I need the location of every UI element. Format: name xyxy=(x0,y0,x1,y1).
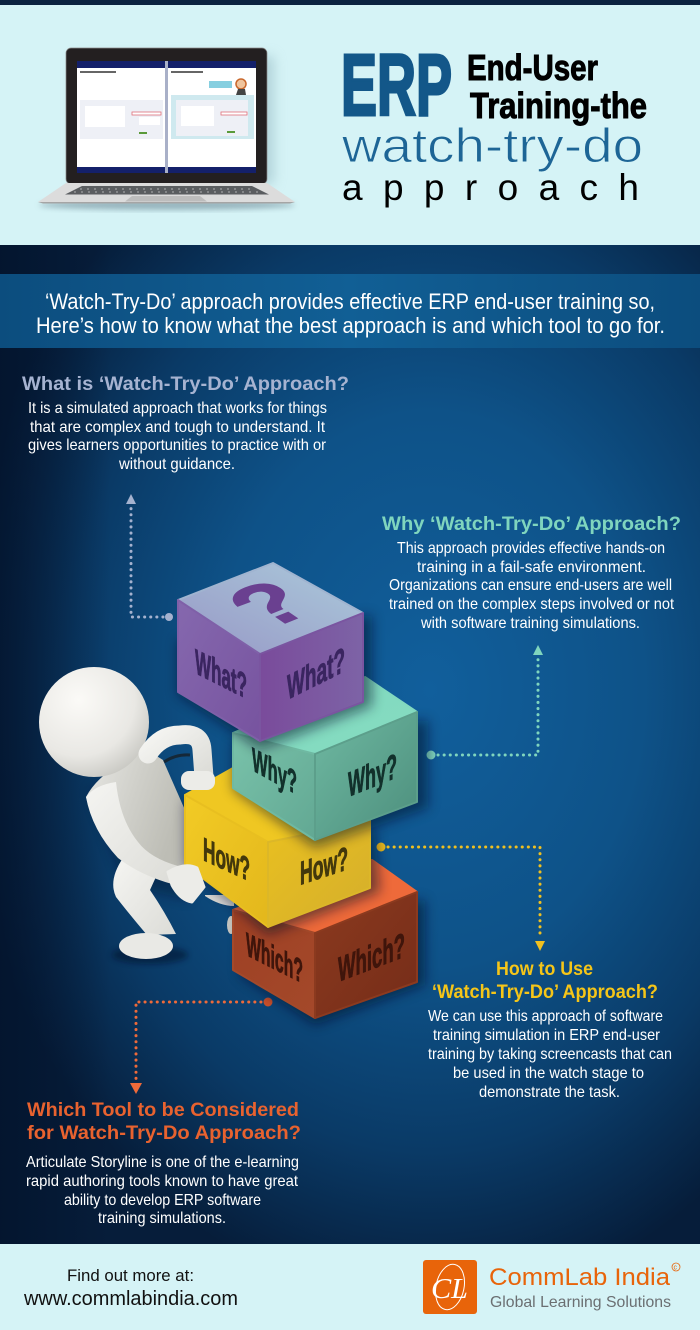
cube: what: What? xyxy=(287,639,345,708)
text block: which: Articulate Storyline is one of the e-learning xyxy=(26,1154,299,1171)
title: Training-the xyxy=(470,85,647,126)
text block: how: training simulation in ERP end-user xyxy=(433,1027,661,1044)
text block: how: How to Use xyxy=(496,958,593,980)
figure: head and arms of white character xyxy=(39,667,215,902)
call to action xyxy=(23,1266,238,1310)
logo: CommLab India: CommLab India xyxy=(489,1264,671,1291)
cube: why: Why? xyxy=(252,740,297,802)
arrow: which connector xyxy=(130,998,272,1094)
arrow: how connector xyxy=(376,842,545,951)
cube: what xyxy=(178,563,372,750)
cube: how: How? xyxy=(300,840,348,893)
icon: question mark: ? xyxy=(206,568,334,640)
logo: CommLab India xyxy=(423,1260,680,1314)
text block: which xyxy=(26,1099,301,1227)
cube: which: Which? xyxy=(246,926,303,991)
logo: CommLab India: CL xyxy=(431,1274,468,1305)
cube: which xyxy=(233,860,425,1025)
text block: what xyxy=(22,373,349,473)
text block: why: Organizations can ensure end-users are well xyxy=(389,577,672,594)
arrow: what connector xyxy=(126,494,173,621)
main blue panel xyxy=(0,245,700,1245)
text block: how: ‘Watch-Try-Do’ Approach? xyxy=(432,981,658,1003)
text block: what: What is ‘Watch-Try-Do’ Approach? xyxy=(22,373,349,395)
intro banner xyxy=(0,274,700,348)
text block: why: This approach provides effective hands-on xyxy=(397,540,665,557)
text block: which: rapid authoring tools known to have great xyxy=(26,1173,299,1190)
text block: how xyxy=(428,958,672,1101)
title: approach xyxy=(342,167,639,208)
cube: how xyxy=(185,768,380,935)
footer panel xyxy=(0,1244,700,1330)
title xyxy=(341,37,647,208)
cube: why xyxy=(233,677,428,848)
text block: why: training in a fail-safe environment. xyxy=(417,559,646,576)
text block: why: trained on the complex steps involved or not xyxy=(389,596,674,613)
title: ERP xyxy=(341,37,452,134)
icon: laptop with watch and try screens xyxy=(38,48,295,210)
cube: how: How? xyxy=(203,831,250,889)
text block: what: gives learners opportunities to practice with or xyxy=(28,437,327,454)
text block: what: that are complex and tough to understand. It xyxy=(30,419,326,436)
text block: why xyxy=(382,513,681,632)
text block: how: training by taking screencasts that can xyxy=(428,1046,672,1063)
title: watch-try-do xyxy=(341,120,643,173)
arrow: why connector xyxy=(426,645,543,760)
cube: why: Why? xyxy=(348,746,397,805)
text block: how: We can use this approach of software xyxy=(428,1008,663,1025)
text block: why: Why ‘Watch-Try-Do’ Approach? xyxy=(382,513,681,535)
cube: what: What? xyxy=(195,641,247,707)
text block: what: It is a simulated approach that works for things xyxy=(28,400,327,417)
figure: legs and torso of white character xyxy=(86,750,235,964)
logo: CommLab India: c xyxy=(674,1264,678,1272)
header panel xyxy=(0,0,700,245)
call to action: www.commlabindia.com xyxy=(23,1288,238,1310)
cube: which: Which? xyxy=(338,925,405,990)
title: End-User xyxy=(467,47,598,88)
text block: which: ability to develop ERP software xyxy=(64,1192,261,1209)
logo: CommLab India: Global Learning Solutions xyxy=(490,1294,671,1311)
text block: which: for Watch-Try-Do Approach? xyxy=(27,1122,301,1144)
text block: which: Which Tool to be Considered xyxy=(27,1099,299,1121)
text block: how: be used in the watch stage to xyxy=(453,1065,644,1082)
text block: how: demonstrate the task. xyxy=(479,1084,620,1101)
call to action: Find out more at: xyxy=(67,1266,194,1285)
text block: what: without guidance. xyxy=(118,456,235,473)
text block: which: training simulations. xyxy=(98,1210,226,1227)
text block: why: with software training simulations. xyxy=(420,615,640,632)
